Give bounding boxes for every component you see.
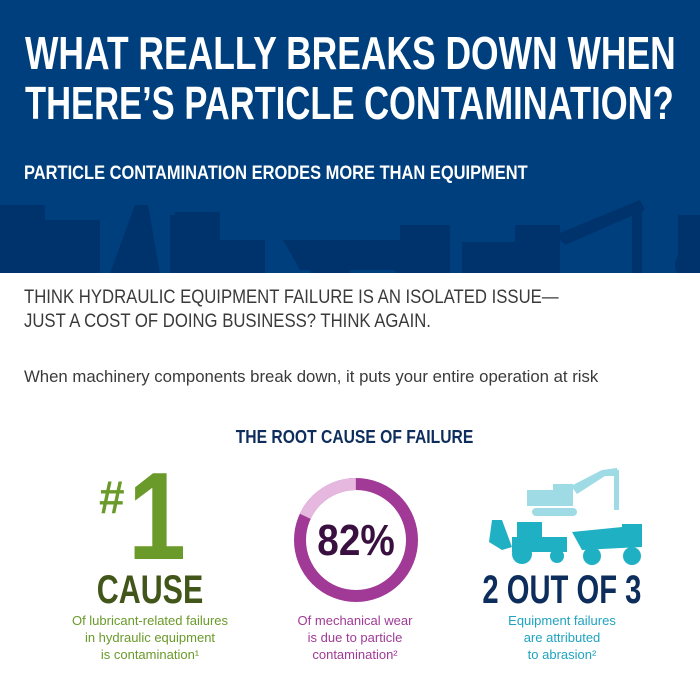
caption: Equipment failures: [508, 613, 616, 628]
caption: is due to particle: [308, 630, 402, 645]
subtitle: PARTICLE CONTAMINATION ERODES MORE THAN EQUIPMENT: [24, 163, 528, 184]
caption: to abrasion²: [528, 647, 596, 662]
stat: 82%: [294, 478, 418, 662]
title: THERE’S PARTICLE CONTAMINATION?: [25, 77, 674, 129]
caption: [72, 613, 228, 662]
intro heading: JUST A COST OF DOING BUSINESS? THINK AGAIN.: [24, 311, 431, 332]
caption: are attributed: [524, 630, 600, 645]
caption: [508, 613, 616, 662]
hash sign: #: [99, 471, 125, 523]
intro text: When machinery components break down, it puts your entire operation at risk: [24, 367, 598, 386]
icon: machinery: [489, 468, 642, 565]
section heading: THE ROOT CAUSE OF FAILURE: [236, 427, 474, 447]
CAUSE label: CAUSE: [97, 568, 203, 612]
caption: Of lubricant-related failures: [72, 613, 228, 628]
title: [25, 27, 676, 129]
header banner: [0, 0, 700, 273]
caption: contamination²: [312, 647, 398, 662]
caption: is contamination¹: [101, 647, 199, 662]
intro heading: THINK HYDRAULIC EQUIPMENT FAILURE IS AN ISOLATED ISSUE—: [24, 287, 559, 308]
percentage: 82%: [317, 516, 395, 565]
caption: in hydraulic equipment: [85, 630, 215, 645]
title: WHAT REALLY BREAKS DOWN WHEN: [25, 27, 676, 79]
big number: 1: [128, 448, 186, 586]
caption: [298, 613, 412, 662]
stat: #1 cause: [72, 448, 228, 662]
donut chart: [294, 478, 418, 602]
silhouettes of machinery: [0, 200, 700, 273]
caption: Of mechanical wear: [298, 613, 412, 628]
stat number: 2 OUT OF 3: [482, 568, 642, 612]
stat: 2 out of 3: [482, 468, 642, 662]
intro heading: [24, 287, 559, 332]
